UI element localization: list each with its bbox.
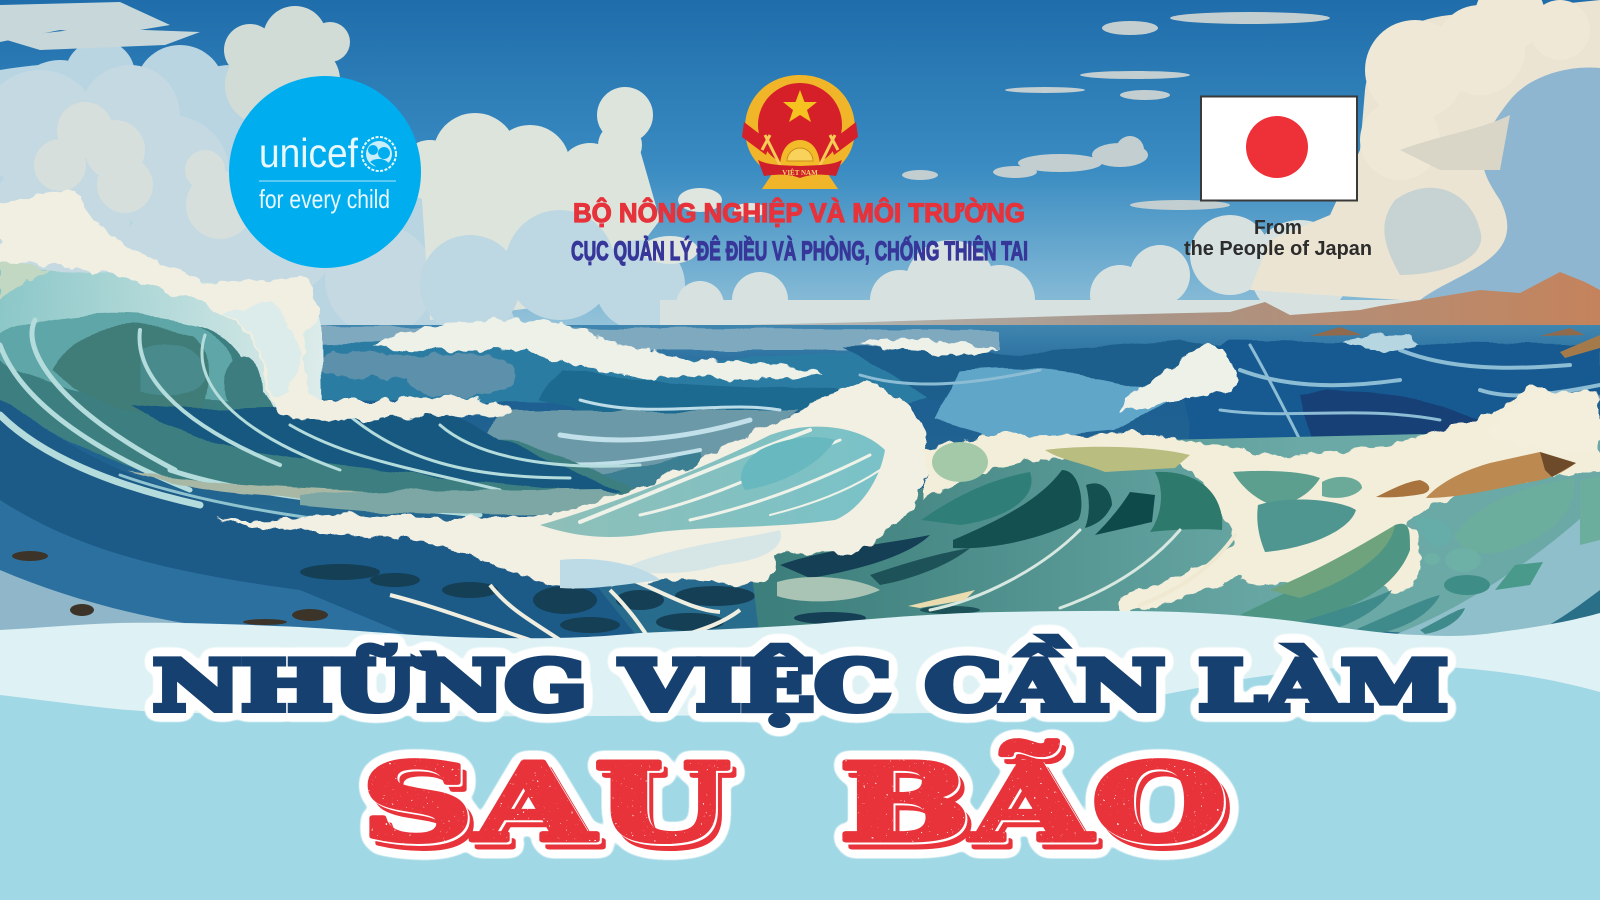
department name: CỤC QUẢN LÝ ĐÊ ĐIỀU VÀ PHÒNG, CHỐNG THIÊN TAI: [571, 234, 1028, 266]
tan reflection band: [130, 472, 640, 515]
green patches on right wave: [1233, 471, 1600, 634]
cream foam lattice across right wave: [925, 388, 1600, 612]
emblem ribbon text: VIỆT NAM: [782, 169, 818, 177]
large left wave body: [0, 268, 650, 505]
small rocks below mountains: [1310, 327, 1585, 336]
foam crests in the distance: [372, 319, 1420, 410]
clouds: small drifting clouds: [902, 12, 1330, 210]
lower panel: light wave: [0, 611, 1600, 900]
teal fan under curls: [930, 530, 1235, 610]
central wave: teal feather fan: [540, 427, 885, 588]
ministry name: BỘ NÔNG NGHIỆP VÀ MÔI TRƯỜNG: [573, 197, 1025, 228]
speckled spray behind left barrel: [310, 351, 515, 397]
sky background: [0, 0, 1600, 340]
logo: Japan flag: [1201, 96, 1357, 200]
central wave: foam crest: [214, 383, 927, 588]
pale lattice on the far sea: [520, 345, 1600, 465]
sea base: [0, 325, 1600, 650]
lower-left deep water: [0, 395, 640, 640]
pale olive patches under crest: [932, 442, 1190, 482]
donor caption: the People of Japan: [1184, 238, 1372, 260]
cream lace over troughs: [390, 575, 740, 640]
icon: unicef emblem: [362, 137, 396, 171]
right crest foam: [1480, 389, 1600, 452]
logo: unicef: [229, 76, 421, 268]
foam cloud under barrel: [777, 577, 880, 601]
mountains on the horizon: [740, 272, 1600, 340]
rocks on right: [1376, 335, 1600, 498]
donor caption: [1184, 217, 1372, 260]
donor caption: From: [1254, 217, 1302, 239]
clouds: left cumulus mass: [0, 2, 520, 340]
clouds: right cumulus: [1250, 0, 1600, 300]
clouds: horizon bank: [660, 215, 1460, 335]
clouds: centre cumulus: [400, 87, 766, 335]
streaks on left wave: [0, 320, 640, 530]
dark curls under the crest: [921, 470, 1222, 548]
unicef tagline: for every child: [259, 184, 390, 214]
far waves and mid-sea bands: [300, 326, 1600, 510]
lower panel: blue base: [0, 666, 1600, 900]
rocks, bottom left: [12, 551, 328, 625]
right green wave: base water: [750, 430, 1600, 640]
title: line 1: NHỮNG VIỆC CẦN LÀM: [153, 637, 1448, 727]
title: line 2: SAU BÃO: [361, 741, 1227, 866]
icon: Vietnam national emblem: [742, 75, 858, 189]
big left wave crest foam: [0, 192, 510, 420]
dark streaks right of centre: [780, 535, 980, 624]
unicef wordmark: unicef: [259, 130, 359, 176]
cream sliver on water: [908, 590, 975, 608]
bottom navy troughs: [300, 564, 755, 633]
